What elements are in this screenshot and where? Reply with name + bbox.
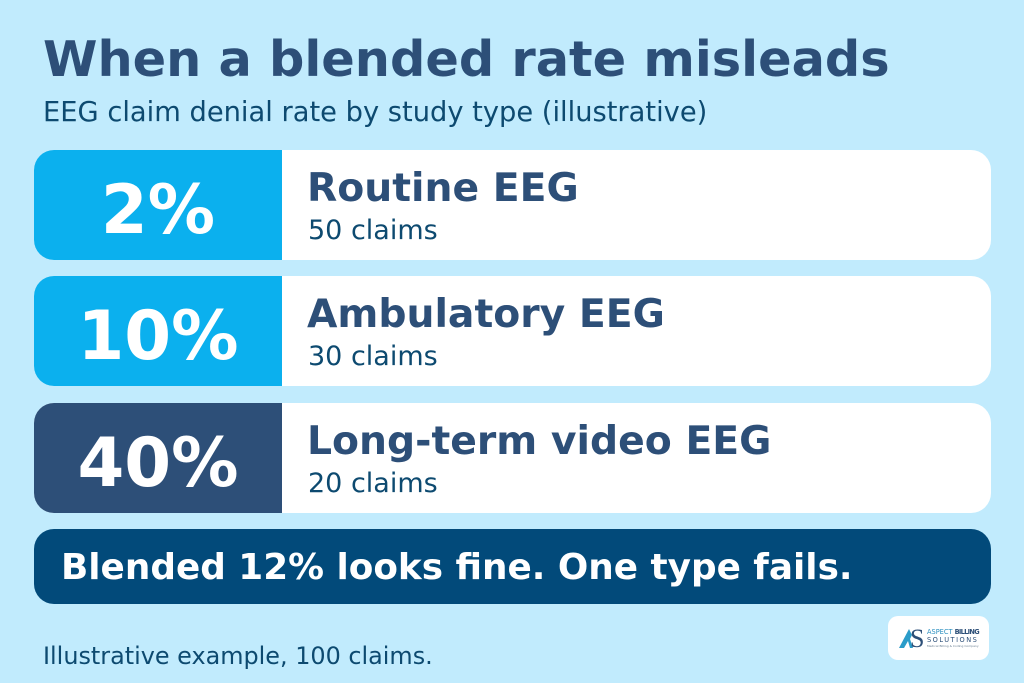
logo wordmark: Medical Billing & Coding Company <box>927 644 979 648</box>
callout text: Blended 12% looks fine. One type fails. <box>61 547 852 588</box>
panel: routine EEG row <box>34 150 991 260</box>
logo card <box>888 616 989 660</box>
routine EEG rate <box>34 150 282 260</box>
long-term video EEG claims: 20 claims <box>308 468 438 499</box>
routine EEG rate: 2% <box>101 171 215 249</box>
long-term video EEG name: Long-term video EEG <box>307 419 771 464</box>
title: When a blended rate misleads <box>43 30 890 88</box>
panel: ambulatory EEG row <box>34 276 991 386</box>
subtitle: EEG claim denial rate by study type (illustrative) <box>43 97 707 128</box>
routine EEG claims: 50 claims <box>308 215 438 246</box>
callout banner <box>34 529 991 604</box>
routine EEG name: Routine EEG <box>307 166 579 211</box>
logo mark <box>899 627 924 649</box>
ambulatory EEG rate <box>34 276 282 386</box>
logo wordmark: SOLUTIONS <box>927 636 978 644</box>
ambulatory EEG claims: 30 claims <box>308 341 438 372</box>
long-term video EEG rate: 40% <box>77 424 239 502</box>
ambulatory EEG rate: 10% <box>77 297 239 375</box>
footnote: Illustrative example, 100 claims. <box>43 642 433 670</box>
ambulatory EEG name: Ambulatory EEG <box>307 292 665 337</box>
panel: long-term video EEG row <box>34 403 991 513</box>
logo wordmark: ASPECT BILLING <box>927 628 979 636</box>
long-term video EEG rate <box>34 403 282 513</box>
logo wordmark <box>927 628 980 648</box>
